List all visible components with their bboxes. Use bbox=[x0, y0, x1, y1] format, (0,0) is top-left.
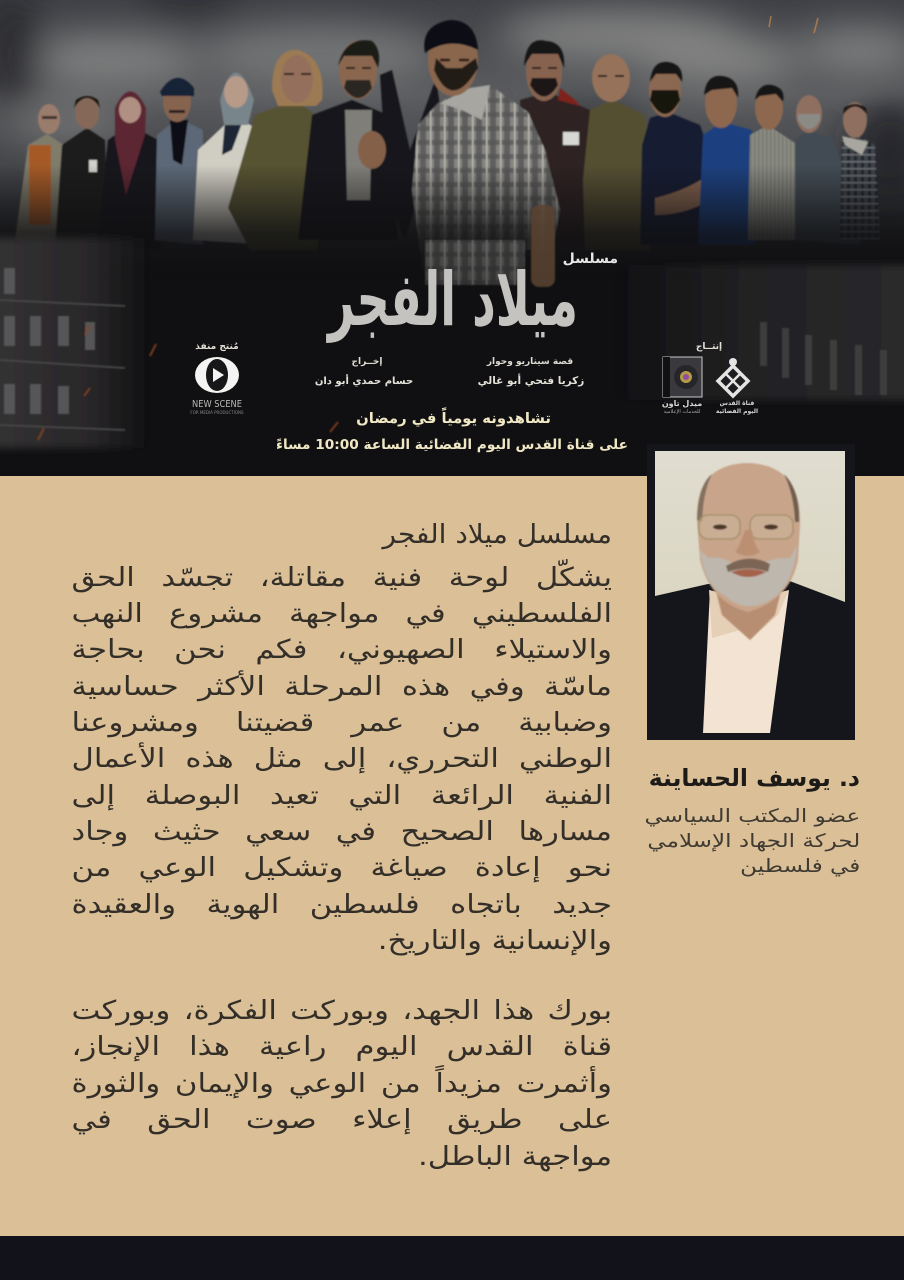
cast line-up bbox=[15, 20, 880, 290]
credit: executive producer: FOR MEDIA PRODUCTIONS bbox=[190, 410, 244, 415]
nose bbox=[735, 530, 760, 556]
credit: director: إخــراج bbox=[352, 357, 382, 367]
cast member 14 grey shirt bbox=[795, 95, 860, 245]
paragraph one: ماسّة وفي هذه المرحلة الأكثر حساسية bbox=[72, 672, 612, 702]
article text block bbox=[72, 520, 612, 1172]
paragraph one: الفلسطيني في مواجهة مشروع النهب bbox=[72, 599, 612, 629]
poster banner: series cast, title and credits bbox=[0, 0, 904, 476]
cast member 9 in dark shirt bbox=[520, 40, 600, 250]
head bbox=[697, 463, 800, 612]
dark smoke fade bbox=[0, 165, 904, 280]
rifle bbox=[380, 70, 442, 240]
jacket bbox=[655, 580, 845, 733]
photo frame bbox=[647, 444, 855, 740]
credit: production logos: اليوم الفضائية bbox=[716, 408, 758, 415]
paragraph two: على طريق إعلاء صوت الحق في bbox=[72, 1105, 612, 1135]
credit: director: حسام حمدي أبو دان bbox=[315, 374, 413, 387]
series label: مسلسل bbox=[563, 251, 618, 267]
paragraph one: والإنسانية والتاريخ. bbox=[378, 926, 612, 956]
cast member 1 bbox=[15, 104, 64, 250]
bottom footer bar bbox=[0, 1236, 904, 1280]
broadcast line 2: على قناة القدس اليوم الفضائية الساعة 10:00 مساءً bbox=[276, 437, 628, 453]
series title: ميلاد الفجر bbox=[326, 257, 578, 343]
paragraph one: والاستيلاء الصهيوني، فكم نحن بحاجة bbox=[72, 635, 612, 665]
cast member 7 in suit bbox=[298, 40, 398, 240]
speaker role: في فلسطين bbox=[740, 856, 860, 877]
paragraph one: الوطني التحرري، إلى مثل هذه الأعمال bbox=[72, 744, 612, 774]
glasses bbox=[699, 515, 793, 539]
credit: production logos bbox=[662, 342, 758, 415]
cast member 2 bbox=[55, 96, 108, 250]
paragraph one: يشكّل لوحة فنية مقاتلة، تجسّد الحق bbox=[72, 563, 612, 593]
cast member 12 blue polo bbox=[698, 76, 756, 245]
sparks in sky bbox=[769, 16, 818, 33]
credit: executive producer: مُنتج منفذ bbox=[195, 342, 239, 352]
icon: film camera lens logo bbox=[663, 357, 702, 397]
cast member 15 plaid scarf bbox=[840, 102, 880, 240]
credit: production logos: قناة القدس bbox=[720, 400, 754, 407]
neck bbox=[712, 575, 785, 640]
credit: story and script: قصة سيناريو وحوار bbox=[486, 357, 573, 367]
face and head details bbox=[697, 463, 800, 640]
paragraph two: وأثمرت مزيداً من الوعي والإيمان والثورة bbox=[72, 1069, 612, 1099]
portrait photo of Dr. Yousef Al-Hasayna bbox=[647, 444, 855, 740]
cast member 3 with hijab bbox=[97, 92, 160, 250]
article heading line: مسلسل ميلاد الفجر bbox=[383, 520, 612, 550]
speaker role: عضو المكتب السياسي bbox=[644, 806, 860, 827]
paragraph one: مسارها الصحيح في سعي حثيث وجاد bbox=[72, 817, 612, 847]
paragraph one bbox=[72, 559, 612, 956]
broadcast line 1: تشاهدونه يومياً في رمضان bbox=[356, 407, 551, 427]
paragraph two bbox=[72, 996, 612, 1172]
paragraph two: بورك هذا الجهد، وبوركت الفكرة، وبوركت bbox=[72, 996, 612, 1026]
cast member 4 with cap bbox=[155, 78, 203, 245]
lead actor lower shirt in shadow bbox=[425, 240, 525, 285]
hair sides bbox=[697, 474, 712, 522]
paragraph two: مواجهة الباطل. bbox=[418, 1142, 612, 1172]
raised hand on rifle bbox=[358, 131, 386, 169]
lead actor in plaid shirt and cap bbox=[412, 20, 560, 290]
photo wall background bbox=[655, 451, 845, 733]
paragraph one: الفنية الرائعة التي تعيد البوصلة إلى bbox=[72, 781, 612, 811]
icon: new scene play logo bbox=[195, 357, 239, 393]
storm clouds bbox=[0, 0, 904, 200]
embers bbox=[38, 325, 338, 440]
beard bbox=[700, 545, 797, 606]
paragraph two: قناة القدس اليوم راعية هذا الإنجاز، bbox=[72, 1032, 612, 1062]
credit: production logos: للخدمات الإعلامية bbox=[664, 409, 701, 415]
cast member 6 in khaki bbox=[228, 50, 322, 250]
cast member 5 with white coat bbox=[193, 72, 272, 245]
speaker role bbox=[644, 806, 860, 877]
credit: story and script bbox=[478, 357, 584, 387]
eyes bbox=[713, 524, 778, 530]
credit: director bbox=[315, 357, 413, 387]
mustache and mouth bbox=[726, 558, 770, 572]
credit: executive producer bbox=[190, 342, 244, 415]
ruined building right bbox=[610, 265, 904, 400]
speaker role: لحركة الجهاد الإسلامي bbox=[647, 831, 860, 852]
lead actor lower arm bbox=[531, 205, 555, 287]
cast member 10 bald khaki uniform bbox=[583, 54, 656, 250]
icon: al-quds channel logo bbox=[718, 358, 748, 396]
sky background bbox=[0, 0, 904, 476]
cast member 11 navy shirt bbox=[640, 62, 717, 245]
credit: production logos: إنتــاج bbox=[696, 342, 722, 352]
paragraph one: جديد باتجاه فلسطين الهوية والعقيدة bbox=[72, 890, 612, 920]
credit: executive producer: NEW SCENE bbox=[192, 399, 242, 410]
credit: production logos: ميدل تاون bbox=[662, 399, 702, 408]
shirt bbox=[703, 590, 789, 733]
speaker name: د. يوسف الحساينة bbox=[649, 764, 860, 792]
ruined building left bbox=[0, 238, 150, 448]
cast member 13 striped shirt bbox=[748, 85, 804, 240]
credit: story and script: زكريا فتحي أبو غالي bbox=[478, 373, 584, 387]
paragraph one: نحو إعادة صياغة وتشكيل الوعي من bbox=[72, 853, 612, 883]
paragraph one: وضبابية من عمر قضيتنا ومشروعنا bbox=[72, 708, 612, 738]
